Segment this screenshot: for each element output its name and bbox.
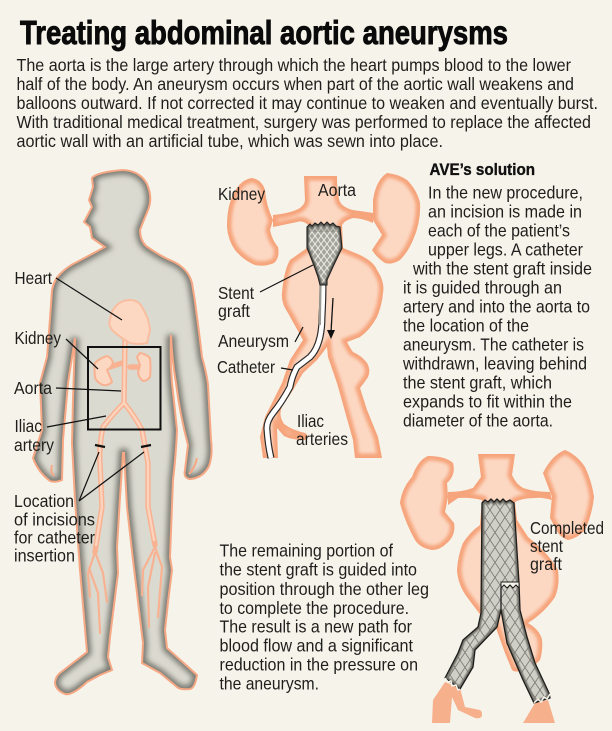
remaining portion text: to complete the procedure. [220, 598, 409, 618]
remaining portion text: the stent graft is guided into [220, 560, 417, 580]
body labels: Heart [14, 268, 52, 288]
location box [88, 347, 160, 430]
heart [109, 300, 150, 344]
solution text: In the new procedure, [428, 182, 583, 202]
body labels: artery [14, 435, 54, 455]
right kidney [372, 173, 420, 264]
remaining portion text [220, 541, 429, 693]
title: Treating abdominal aortic aneurysms [20, 14, 508, 51]
body labels: Aorta [14, 378, 52, 398]
remaining portion text: The result is a new path for [220, 616, 412, 636]
leader lines [260, 265, 313, 370]
solution text: it is guided through an [403, 277, 562, 297]
remaining portion text: reduction in the pressure on [220, 654, 418, 674]
solution text: the stent graft, which [403, 372, 552, 392]
body labels: of incisions [14, 510, 95, 530]
AVE's solution heading: AVE’s solution [430, 161, 535, 179]
left kidney [227, 178, 278, 266]
solution text: artery and into the aorta to [403, 296, 590, 316]
body labels: for catheter [14, 528, 95, 548]
solution text: expands to fit within the [403, 391, 572, 411]
body silhouette [33, 170, 212, 694]
diagram labels: Aorta [318, 180, 356, 200]
diagram labels: arteries [296, 429, 348, 449]
left kidney [400, 456, 454, 550]
intro text: aortic wall with an artificial tube, which was sewn into place. [16, 131, 443, 151]
arteries in body [88, 337, 162, 633]
lower iliac arteries [432, 682, 555, 723]
body labels [14, 268, 95, 566]
completed stent graft diagram [400, 450, 604, 723]
catheter [267, 285, 323, 458]
body leader lines [47, 278, 144, 501]
body labels: Kidney [14, 328, 61, 348]
intro text: half of the body. An aneurysm occurs when part of the aortic wall weakens and [16, 74, 574, 94]
solution text: withdrawn, leaving behind [402, 353, 587, 373]
solution text: the location of the [403, 316, 529, 336]
completed graft [445, 499, 550, 703]
diagram labels: Aneurysm [218, 331, 289, 351]
diagram labels [217, 180, 356, 449]
stent insertion diagram [217, 173, 420, 458]
diagram labels: Kidney [218, 184, 265, 204]
aorta and aneurysm [448, 454, 559, 672]
human body diagram [33, 170, 212, 694]
solution text: upper legs. A catheter [428, 240, 583, 260]
flow arrow [327, 298, 335, 339]
remaining portion text: The remaining portion of [220, 541, 393, 561]
remaining portion text: position through the other leg [220, 579, 429, 599]
intro text: The aorta is the large artery through which the heart pumps blood to the lower [16, 55, 571, 75]
completed stent graft label: stent [530, 536, 563, 556]
completed stent graft label: graft [530, 554, 562, 574]
intro text [16, 55, 598, 151]
body labels: Iliac [14, 416, 42, 436]
right kidney [543, 450, 594, 540]
body labels: Location [14, 491, 74, 511]
diagram labels: Stent [218, 283, 254, 303]
remaining portion text: blood flow and a significant [220, 636, 413, 656]
solution text: diameter of the aorta. [403, 410, 553, 430]
body labels: insertion [14, 546, 75, 566]
diagram labels: graft [218, 301, 250, 321]
stent graft [305, 222, 343, 285]
solution text: each of the patient’s [428, 220, 570, 240]
solution text: aneurysm. The catheter is [403, 334, 584, 354]
solution text: with the stent graft inside [412, 258, 592, 278]
diagram labels: Iliac [297, 411, 324, 431]
incision marks [95, 445, 151, 447]
diagram labels: Catheter [217, 357, 275, 377]
remaining portion text: the aneurysm. [220, 673, 319, 693]
aorta and aneurysm [260, 176, 383, 458]
solution text [402, 182, 592, 430]
solution text: an incision is made in [428, 201, 582, 221]
completed stent graft label [530, 518, 604, 574]
kidneys in body [94, 353, 150, 385]
